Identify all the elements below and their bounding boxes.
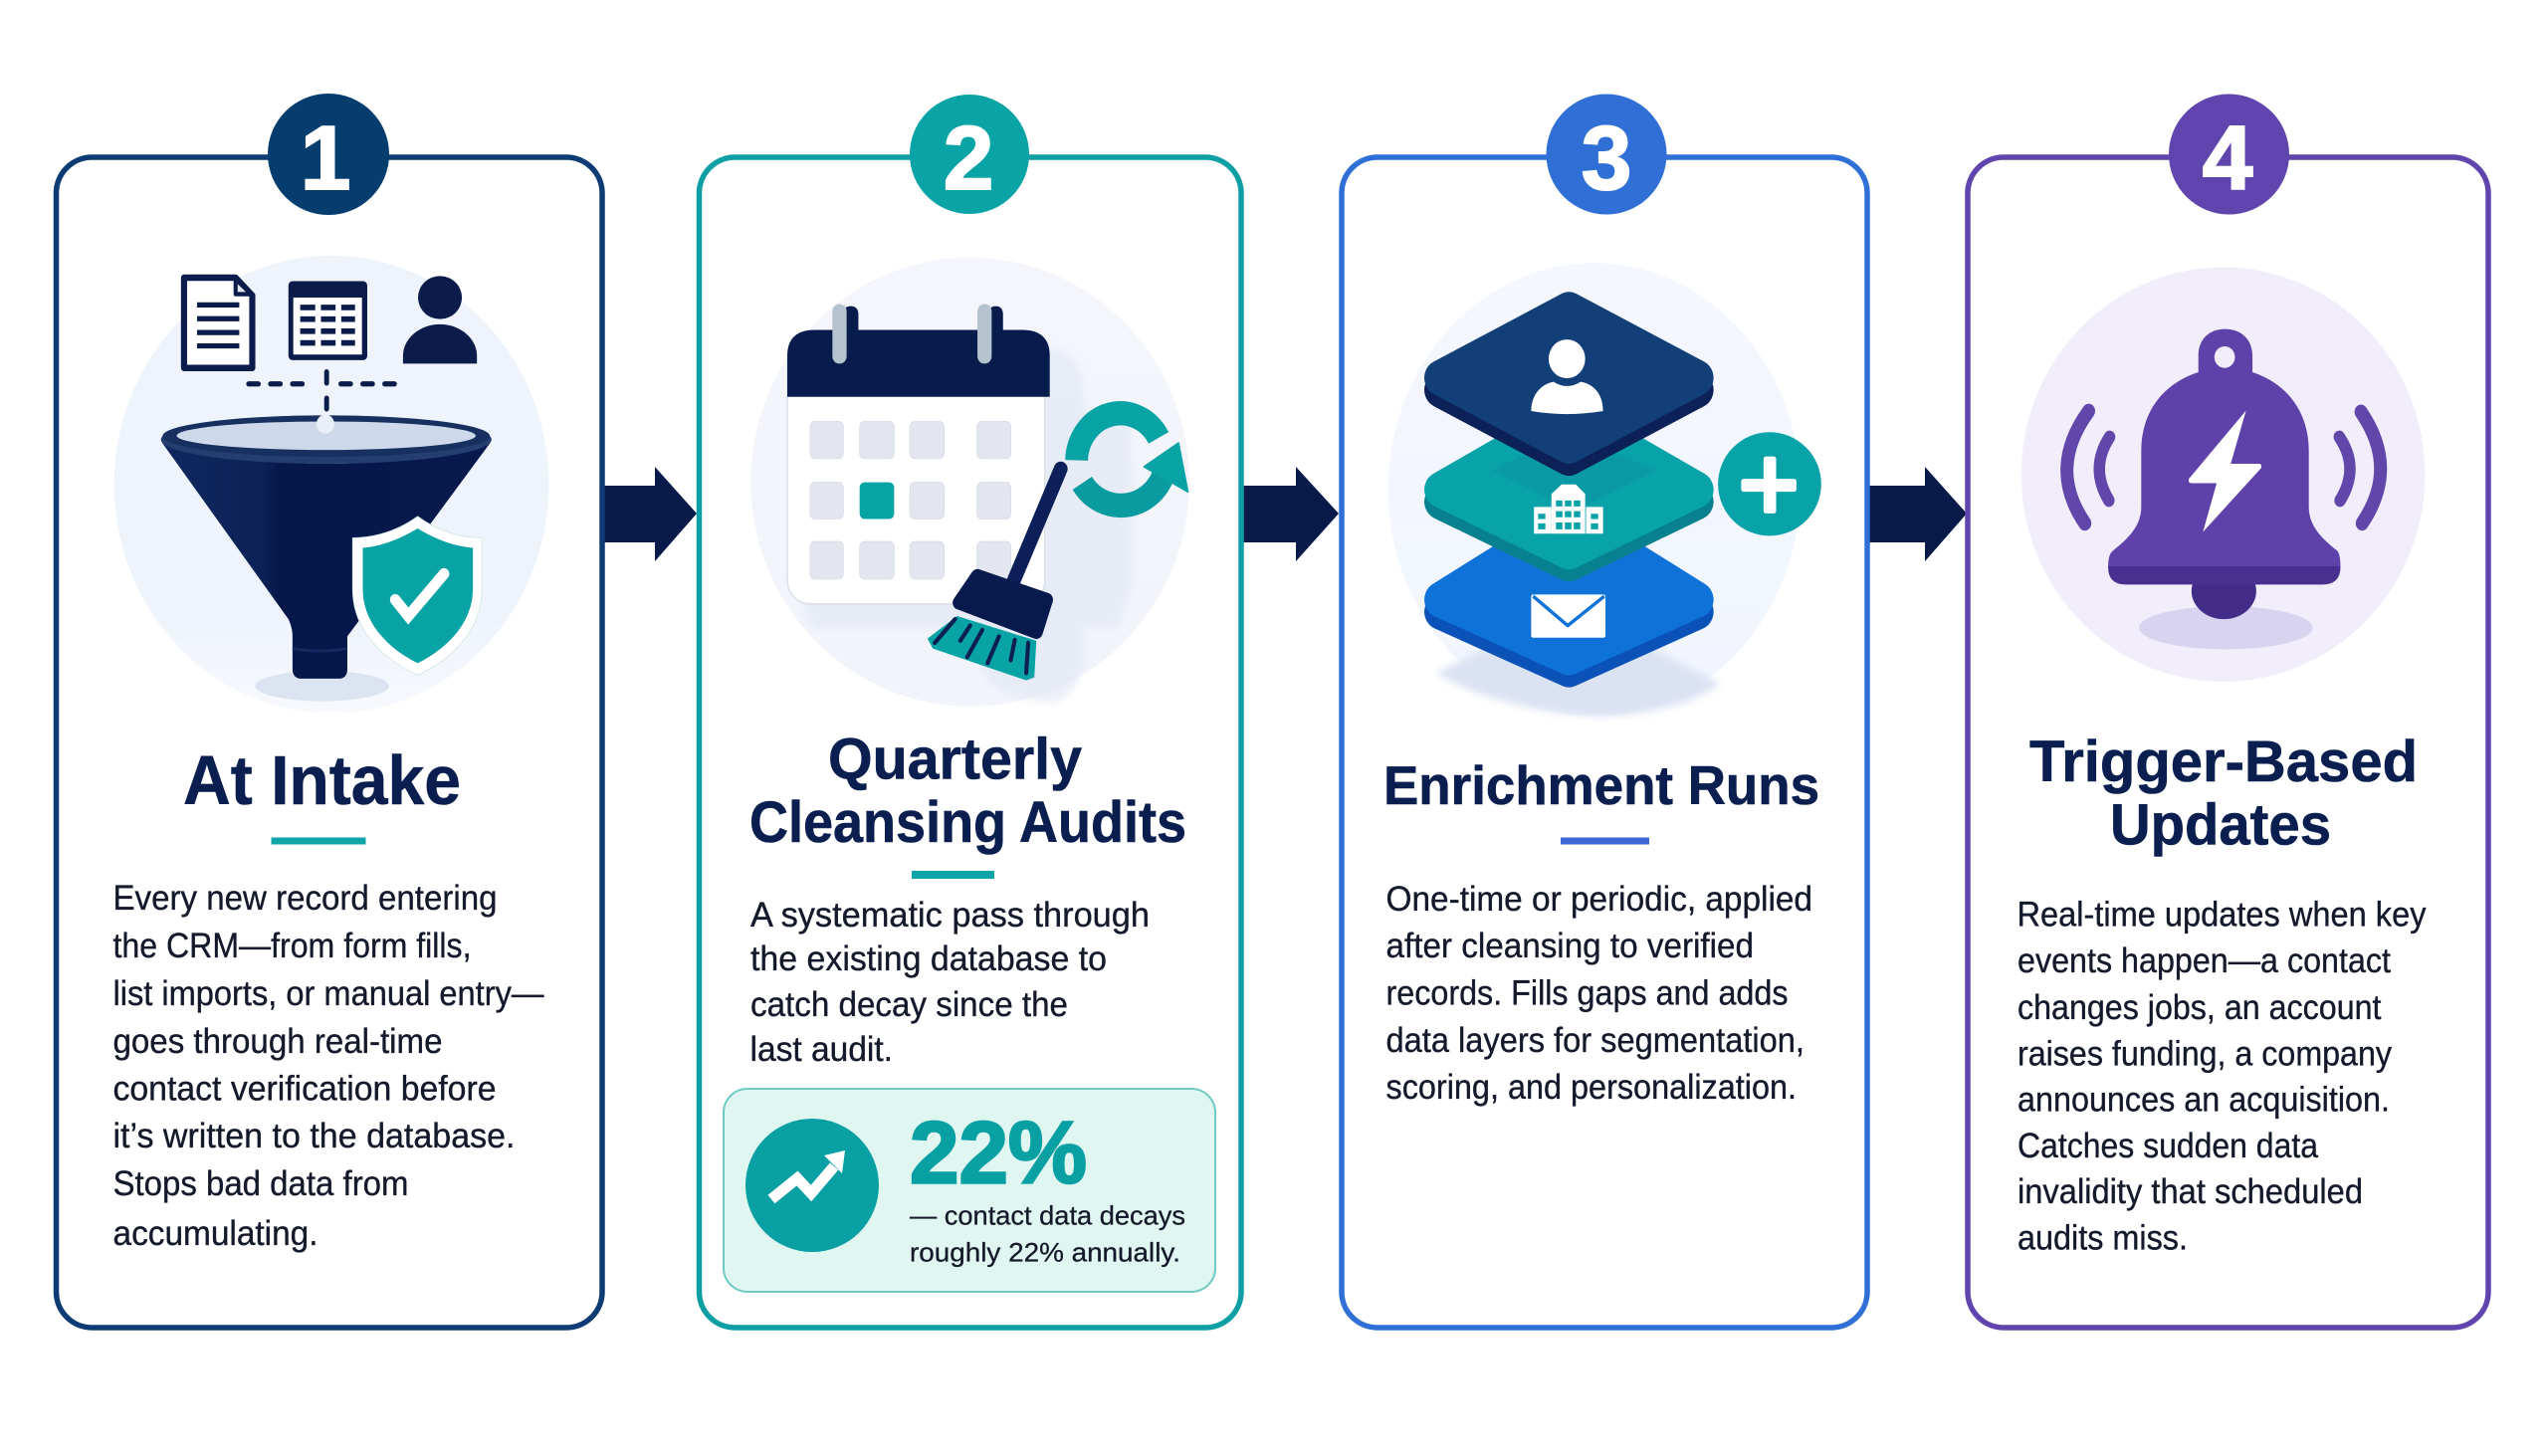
heading: Trigger-Based Updates: Trigger-Based (2029, 729, 2418, 794)
icon: trending up (745, 1119, 879, 1252)
number badge 4 (2169, 94, 2289, 215)
number badge 3: 3 (1582, 108, 1631, 209)
panel: step 2 quarterly cleansing audits (699, 95, 1241, 1328)
body text: contact verification before (113, 1069, 496, 1109)
panel: step 3 enrichment runs (1342, 94, 1867, 1328)
callout: 22% stat (724, 1089, 1215, 1292)
heading: Enrichment Runs: Enrichment Runs (1383, 754, 1819, 816)
body text: the CRM—from form fills, (113, 927, 472, 965)
body text: invalidity that scheduled (2017, 1172, 2363, 1211)
heading: Quarterly Cleansing Audits: Cleansing Audits (749, 790, 1186, 855)
icon: broom (928, 469, 1061, 681)
stat caption (910, 1200, 1185, 1268)
panel frame 3 (1342, 157, 1867, 1328)
icon: bell (2108, 329, 2340, 619)
body text: records. Fills gaps and adds (1385, 973, 1788, 1013)
illustration: alert bell (2021, 268, 2425, 682)
body text: list imports, or manual entry— (113, 974, 543, 1013)
body text: it’s written to the database. (113, 1117, 516, 1155)
body text: data layers for segmentation, (1385, 1021, 1805, 1060)
heading: Quarterly Cleansing Audits: Quarterly (828, 727, 1082, 792)
body text: events happen—a contact (2017, 941, 2391, 980)
heading: Quarterly Cleansing Audits (749, 727, 1186, 855)
number badge 1: 1 (301, 108, 350, 209)
illustration: funnel with shield (114, 256, 548, 714)
stat number: 22% (910, 1103, 1087, 1202)
illustration: calendar, broom and refresh (750, 258, 1189, 707)
panel frame 1 (56, 157, 602, 1328)
body text: scoring, and personalization. (1385, 1068, 1797, 1107)
heading: At Intake: At Intake (183, 741, 461, 819)
heading: Trigger-Based Updates (2029, 729, 2418, 858)
body text (1385, 880, 1812, 1107)
icon: person (403, 276, 477, 363)
accent rule (271, 838, 366, 844)
stat caption: — contact data decays (910, 1200, 1185, 1230)
body text: accumulating. (113, 1214, 318, 1253)
body text: Every new record entering (113, 879, 498, 918)
body text (750, 896, 1150, 1069)
panel: step 1 at intake (56, 94, 602, 1328)
icon: document (184, 278, 252, 368)
number badge 2: 2 (944, 108, 993, 209)
layer: company (1441, 416, 1696, 563)
funnel (161, 415, 492, 701)
body text: announces an acquisition. (2017, 1081, 2390, 1119)
stat caption: roughly 22% annually. (910, 1238, 1180, 1268)
icon: calendar (787, 305, 1050, 604)
heading: Trigger-Based Updates: Updates (2110, 792, 2331, 858)
arrow: step 1 to step 2 (604, 467, 697, 561)
illustration: stacked data layers (1388, 263, 1821, 717)
number badge 3 (1547, 94, 1666, 215)
body text: Stops bad data from (113, 1164, 408, 1203)
body text: One-time or periodic, applied (1385, 880, 1812, 919)
body text: audits miss. (2017, 1218, 2188, 1258)
panel frame 4 (1968, 157, 2488, 1328)
dashed connectors (249, 372, 400, 409)
body text: raises funding, a company (2017, 1035, 2392, 1073)
icon: verified shield (352, 517, 482, 675)
body text: last audit. (750, 1030, 893, 1069)
layer: contact (1441, 311, 1696, 458)
number badge 1 (268, 94, 389, 215)
number badge 2 (910, 95, 1029, 214)
body text: goes through real-time (113, 1022, 442, 1061)
icon: sound waves (2067, 411, 2381, 523)
body text: Real-time updates when key (2017, 896, 2427, 934)
layer: email (1441, 520, 1696, 669)
body text: catch decay since the (750, 985, 1068, 1024)
arrow: step 2 to step 3 (1243, 467, 1339, 561)
number badge 4: 4 (2203, 108, 2253, 209)
body text (113, 879, 543, 1253)
body text: Catches sudden data (2017, 1127, 2318, 1165)
body text (2017, 896, 2427, 1258)
accent rule (912, 871, 994, 879)
icon: refresh arrows (1077, 413, 1187, 506)
body text: A systematic pass through (750, 896, 1150, 935)
body text: after cleansing to verified (1385, 927, 1754, 965)
panel: step 4 trigger-based updates (1968, 94, 2488, 1328)
body text: changes jobs, an account (2017, 988, 2382, 1027)
icon: plus badge (1718, 432, 1821, 535)
icon: building (1534, 485, 1603, 533)
panel frame 2 (699, 157, 1241, 1328)
icon: spreadsheet (289, 282, 367, 360)
body text: the existing database to (750, 939, 1107, 978)
arrow: step 3 to step 4 (1869, 467, 1967, 561)
accent rule (1561, 838, 1649, 844)
